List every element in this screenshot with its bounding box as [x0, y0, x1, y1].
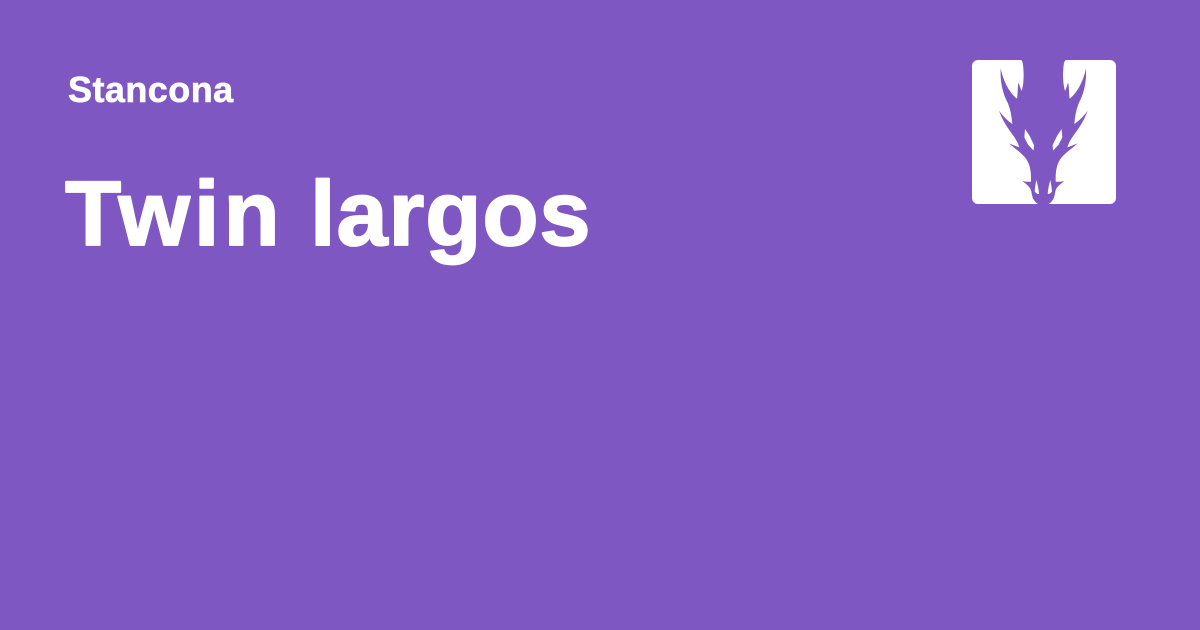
icon: right nostril: [1048, 180, 1052, 194]
title: largos: [310, 163, 592, 265]
brand name: Stancona: [68, 69, 234, 110]
icon: dragon logo: [972, 58, 1116, 205]
title: Twin: [65, 163, 284, 265]
icon: left eye: [1024, 129, 1034, 151]
icon: right eye: [1053, 129, 1062, 151]
icon: left nostril: [1035, 180, 1039, 194]
